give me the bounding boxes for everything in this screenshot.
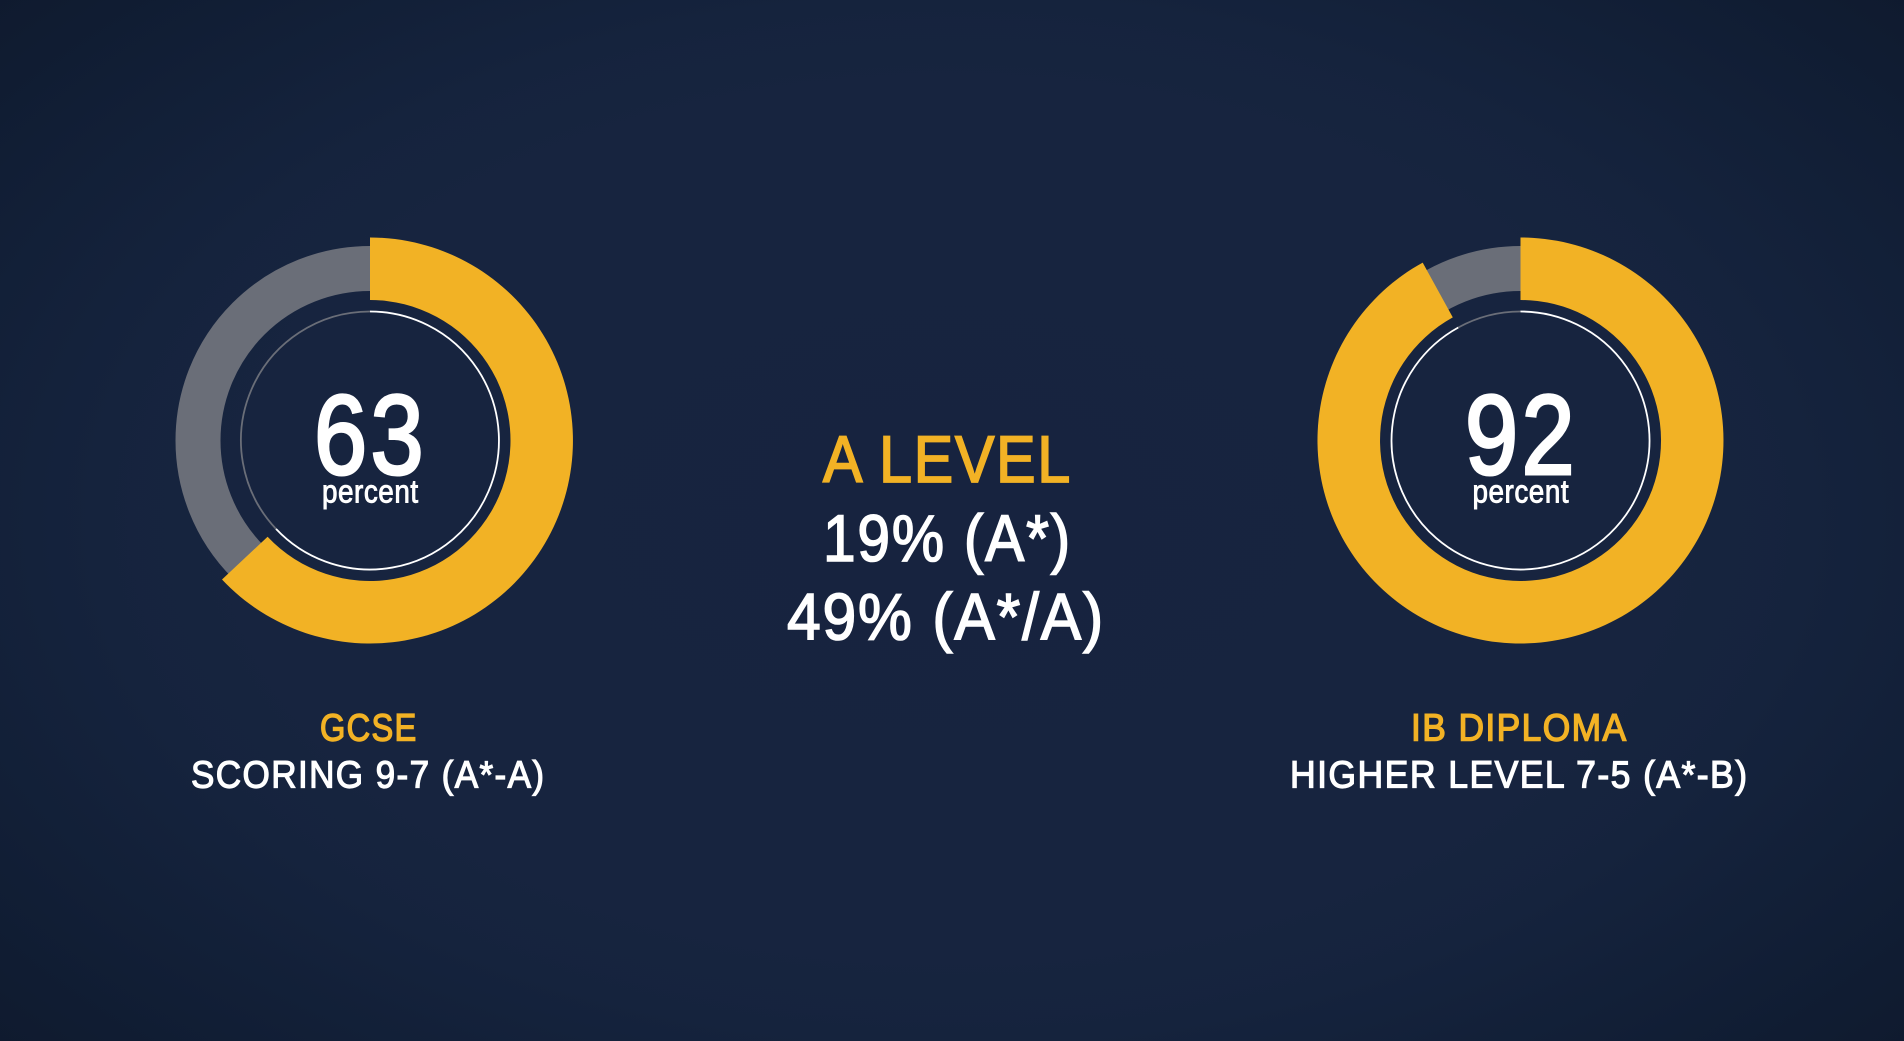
unit: percent: percent	[1472, 474, 1569, 510]
number: 63: 63	[314, 372, 427, 498]
yellow 92 percent arc	[1317, 238, 1723, 644]
caption: IB Diploma	[1290, 708, 1748, 796]
label: IB Diploma: IB DIPLOMA	[1411, 708, 1628, 750]
inner ring white portion: GCSE	[276, 312, 499, 570]
yellow 63 percent arc	[222, 238, 573, 643]
caption: GCSE	[191, 708, 546, 796]
heading: A Level: A LEVEL	[823, 422, 1072, 496]
description: higher level range: HIGHER LEVEL 7-5 (A*-B)	[1290, 754, 1748, 796]
panel: IB Diploma donut chart	[1317, 238, 1723, 644]
description: scoring range: SCORING 9-7 (A*-A)	[191, 754, 546, 796]
inner ring gray portion: GCSE	[241, 311, 370, 529]
stat: 49% A*/A: 49% (A*/A)	[787, 580, 1105, 654]
stat: 19% A*: 19% (A*)	[823, 501, 1072, 575]
gray remainder track: GCSE	[198, 268, 542, 612]
unit: percent: percent	[322, 474, 419, 510]
label: GCSE: GCSE	[320, 708, 418, 750]
number: 92: 92	[1465, 372, 1578, 498]
gray remainder track: IB Diploma	[1348, 268, 1692, 612]
inner ring white portion: IB Diploma	[1392, 312, 1650, 569]
inner ring gray portion: IB Diploma	[1458, 312, 1520, 328]
panel: A Level statistics	[787, 422, 1105, 654]
panel: GCSE donut chart	[198, 238, 573, 643]
